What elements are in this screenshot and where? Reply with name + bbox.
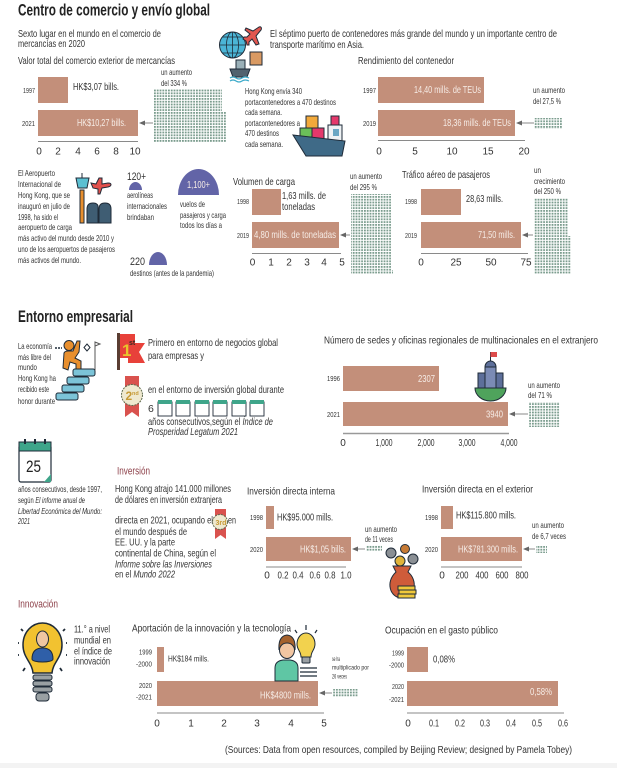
text block: años consecutivos Legatum: Prosperidad Legatum 2021 [148, 426, 238, 438]
bar 2021: 2021 [22, 119, 35, 128]
axis: 2,000 [418, 438, 435, 449]
chart heading: Inversión directa interna [247, 486, 335, 498]
icon: money bag and coins [386, 544, 418, 598]
callout: un aumento de 6,7 veces: de 6,7 veces [532, 531, 566, 541]
bar 2021: 2021 [327, 410, 340, 419]
text block: Hong Kong envía 340: portacontenedores a 470 destinos [245, 97, 336, 107]
stat: 1,100+ vuelos [178, 169, 226, 230]
panel: ocupación en el gasto público [385, 624, 568, 730]
axis: 800 [516, 570, 529, 582]
six calendars [148, 400, 264, 416]
axis: 0 [154, 718, 160, 730]
chart heading: Valor total del comercio exterior de mercancías [18, 55, 175, 67]
axis: 1.0 [340, 570, 352, 582]
icon: first-place flag [117, 333, 145, 370]
callout: se ha multiplicado por 26 veces: se ha [332, 656, 340, 663]
callout: un aumento del 295 %: un aumento [350, 171, 382, 181]
callout: se ha multiplicado por 26 veces: multiplicado por [332, 664, 370, 672]
bar 2019: 4,80 mills. de toneladas [254, 229, 336, 241]
panel: valor total del comercio exterior [18, 55, 226, 158]
axis: 2 [55, 146, 61, 158]
bar 2020: HK$781.300 mills. [458, 544, 518, 556]
stat: 1,100+ vuelos: 1,100+ [187, 179, 210, 191]
bar 2020-2021: 0,58% [530, 686, 552, 698]
text block: sexto lugar: Sexto lugar en el mundo en el comercio de [18, 28, 161, 40]
axis [264, 567, 352, 582]
text block: 11.° a nivel mundial: el índice de [74, 646, 112, 658]
bar 1999-2000: 0,08% [433, 654, 455, 666]
bar 2020-2021: 2020 [392, 682, 404, 691]
axis: 0.6 [310, 570, 321, 582]
text block: aeropuerto internacional [18, 168, 115, 265]
axis: 0 [405, 718, 411, 730]
icon: calendar 25: 25 [26, 457, 41, 476]
text block: séptimo puerto: transporte marítimo en Asia. [270, 39, 364, 51]
axis [340, 434, 518, 449]
axis: 5 [339, 258, 345, 268]
text block: la economía más libre: honor durante [18, 396, 55, 406]
text block: la economía más libre: mundo [18, 362, 37, 372]
axis: 3 [254, 718, 260, 730]
axis: 20 [518, 146, 530, 158]
stat: 120+ aerolíneas [127, 171, 167, 222]
text block: aeropuerto internacional: más activo del mundo desde 2010 y [18, 233, 115, 243]
text block: la economía más libre: más libre del [18, 352, 51, 362]
text block: entorno de inversión: en el entorno de inversión global durante [148, 384, 284, 396]
bar 1998 [237, 189, 326, 215]
chart heading: Ocupación en el gasto público [385, 624, 498, 636]
axis: 4,000 [500, 438, 518, 449]
stat: 1,100+ vuelos: pasajeros y carga [180, 210, 226, 220]
arrow [352, 546, 365, 552]
stat: 120+ aerolíneas: internacionales [127, 201, 167, 211]
axis [250, 254, 345, 268]
stat: 1,100+ vuelos: vuelos de [180, 199, 205, 209]
callout: un crecimiento del 250 %: un [534, 165, 541, 175]
axis: 0 [264, 570, 270, 582]
axis: 200 [456, 570, 469, 582]
axis: 2 [221, 718, 227, 730]
axis: 0.2 [278, 570, 289, 582]
bar 1998: 1998 [250, 513, 263, 522]
text block: primero en entorno de negocios [148, 337, 278, 362]
axis [405, 713, 568, 730]
axis: 15 [482, 146, 494, 158]
bar 1998: toneladas [282, 201, 315, 213]
bar 2021 [22, 110, 138, 136]
axis: 4 [321, 258, 327, 268]
icon: person with light bulb [275, 625, 317, 681]
callout: un aumento del 27,5 % [533, 85, 565, 106]
bar 1997: 14,40 mills. de TEUs [414, 84, 481, 96]
axis: 0.1 [429, 718, 439, 730]
axis: 0.2 [455, 718, 465, 730]
bar 2019: 2019 [363, 119, 376, 128]
axis: 600 [496, 570, 509, 582]
axis: 0.8 [324, 570, 336, 582]
bar 1996: 1996 [327, 374, 340, 383]
icon: headquarters building on globe [475, 352, 506, 401]
axis: 0 [376, 146, 382, 158]
bar 2020 [425, 537, 522, 561]
bar 1997: 1997 [23, 86, 35, 95]
callout: un aumento de 6,7 veces: un aumento [532, 520, 564, 530]
callout: se ha multiplicado por 26 veces: 26 veces [332, 674, 347, 680]
dot grid 27,5 % [534, 118, 562, 129]
callout: un aumento del 334 %: del 334 % [161, 78, 187, 88]
bar 1997 [363, 77, 484, 103]
callout: un aumento del 295 %: del 295 % [350, 182, 377, 192]
axis [439, 567, 529, 582]
callout: se ha multiplicado por 26 veces [332, 656, 370, 680]
icon: container ship [293, 116, 345, 156]
text block: aeropuerto internacional: El Aeropuerto [18, 168, 55, 178]
axis [36, 142, 141, 158]
dot grid 11 veces [366, 545, 382, 551]
chart heading: Rendimiento del contenedor [358, 55, 454, 67]
bar 2020-2021: HK$4800 mills. [260, 690, 311, 702]
bar 1998: HK$95.000 mills. [277, 512, 333, 524]
text block: años consecutivos Legatum: años consecutivos,según el Índice de [148, 415, 273, 428]
bar 1998: HK$115.800 mills. [456, 510, 516, 522]
stat: 220 destinos [130, 252, 214, 278]
axis: 0 [418, 258, 424, 268]
text block: aeropuerto internacional: más activos del mundo. [18, 255, 81, 265]
bar 1998: 1998 [405, 197, 417, 206]
bar 1998: 28,63 mills. [466, 193, 503, 205]
axis: 8 [113, 146, 119, 158]
bar 2019: 2019 [405, 231, 417, 240]
bar 1999-2000 [136, 647, 209, 672]
axis: 75 [520, 258, 532, 268]
heading: Entorno empresarial: Entorno empresarial [18, 307, 133, 326]
axis: 0 [250, 258, 256, 268]
stat: 120+ aerolíneas: brindaban [127, 212, 154, 222]
axis: 0.6 [558, 718, 568, 730]
text block: Hong Kong envía 340: portacontenedores a [245, 118, 300, 128]
callout: un aumento del 71 %: un aumento [528, 380, 560, 390]
axis [376, 140, 530, 158]
axis: 1 [188, 718, 194, 730]
arrow [139, 120, 153, 126]
bar 1999-2000 [389, 647, 455, 672]
icon: third-place medal: 3rd [216, 520, 226, 527]
arrow [516, 120, 534, 126]
dot grid 295 % [351, 194, 393, 274]
icon: third-place medal [212, 509, 228, 539]
bar 2020-2021 [136, 681, 318, 706]
chart heading: Tráfico aéreo de pasajeros [402, 169, 490, 181]
stat: 1,100+ vuelos: todos los días a [180, 220, 222, 230]
chart heading: Aportación de la innovación y la tecnología [132, 622, 291, 634]
text block: Hong Kong atrajo: en el Mundo 2022 [115, 568, 175, 580]
text block: años consecutivos Legatum [148, 415, 273, 438]
panel: volumen de carga [233, 171, 393, 274]
stat: 120+ aerolíneas: aerolíneas [127, 190, 153, 200]
icon: control tower, plane and hangars [76, 173, 111, 223]
axis: 50 [485, 258, 497, 268]
callout: un crecimiento del 250 % [534, 165, 565, 196]
callout: un aumento de 11 veces [365, 524, 397, 544]
icon: first-place flag: st [129, 340, 136, 347]
callout: un aumento del 334 % [161, 67, 192, 88]
bar 2020-2021: 2020 [139, 681, 152, 690]
text block: aeropuerto internacional: Internacional de [18, 179, 61, 189]
dot grid 334 % [154, 89, 226, 142]
text block: años consecutivos desde 1997: Libertad Económica del Mundo: [18, 506, 102, 516]
bar 1998 [405, 189, 503, 215]
text block: sexto lugar [18, 28, 161, 50]
axis: 10 [446, 146, 458, 158]
dot grid 250 % [534, 198, 571, 274]
text block: séptimo puerto [270, 28, 557, 51]
bar 1999-2000: -2000 [389, 660, 404, 670]
text block: años consecutivos desde 1997 [17, 484, 102, 526]
bar 1998: 1998 [425, 513, 438, 522]
bar 2020-2021: -2021 [389, 695, 404, 704]
bar 1997 [23, 77, 119, 103]
arrow [340, 232, 350, 238]
six calendars: 6 [148, 403, 154, 415]
text block: Hong Kong envía 340: Hong Kong envía 340 [245, 86, 302, 96]
text block: aeropuerto internacional: aeropuerto de carga [18, 222, 72, 232]
bar 2020-2021 [389, 681, 558, 706]
text block: sexto lugar: mercancías en 2020 [18, 38, 85, 50]
bar 1998: 1,63 mills. de [282, 190, 326, 202]
axis: 6 [94, 146, 100, 158]
arrow [319, 690, 332, 696]
bar 2019 [405, 222, 521, 248]
bar 2021 [327, 402, 508, 426]
bar 2020 [250, 537, 351, 561]
callout: un crecimiento del 250 %: crecimiento [534, 176, 565, 186]
text block: Hong Kong atrajo: Informe sobre las Inversiones [115, 558, 213, 570]
axis: 5 [321, 718, 327, 730]
axis: 1 [268, 258, 274, 268]
chart heading: Volumen de carga [233, 176, 295, 188]
text block: aeropuerto internacional: 1998, ha sido el [18, 212, 58, 222]
text block: la economía más libre: Hong Kong ha [18, 373, 56, 383]
arrow [522, 232, 533, 238]
bar 1999-2000: 1999 [139, 648, 152, 656]
bar 2020: 2020 [425, 545, 438, 554]
panel: inversión directa interna [247, 486, 397, 582]
panel: aportación de la innovación y la tecnología [132, 622, 370, 730]
text block: primero en entorno de negocios: para empresas y [148, 350, 205, 362]
axis: 0 [36, 146, 42, 158]
dot grid 6,7 veces [536, 546, 547, 553]
bar 1998 [425, 506, 516, 529]
text block: la economía más libre [18, 341, 56, 406]
text block: Hong Kong atrajo: EE. UU. y la parte [115, 536, 175, 548]
bar 1999-2000: 1999 [392, 648, 404, 658]
axis: 3,000 [458, 438, 476, 449]
text block: Hong Kong atrajo: continental de China, según el [115, 548, 216, 560]
text block: Hong Kong atrajo: en [228, 514, 236, 526]
axis: 4 [288, 718, 294, 730]
text block: Hong Kong atrajo [115, 483, 236, 580]
callout: un aumento del 71 % [528, 380, 560, 400]
text block: 11.° a nivel mundial: mundial en [74, 634, 111, 646]
callout: un aumento de 11 veces: un aumento [365, 524, 397, 534]
text block: aeropuerto internacional: Hong Kong, que se [18, 190, 70, 200]
text block: 11.° a nivel mundial: 11.° a nivel [74, 624, 110, 636]
text block: primero en entorno de negocios: Primero en entorno de negocios global [148, 337, 278, 349]
text block: aeropuerto internacional: uno de los aeropuertos de pasajeros [18, 244, 115, 254]
panel: rendimiento del contenedor [358, 55, 565, 158]
bar 2021: HK$10,27 bills. [77, 117, 126, 129]
bar 2019: 18,36 mills. de TEUs [443, 117, 511, 129]
title: Centro de comercio y envío global: Centro de comercio y envío global [18, 0, 210, 20]
callout: un aumento del 71 %: del 71 % [528, 390, 552, 400]
bar 1996: 2307 [418, 373, 435, 385]
callout: un aumento del 27,5 %: del 27,5 % [533, 96, 561, 106]
text block: Hong Kong envía 340 [245, 86, 336, 149]
icon: first-place flag: 1 [122, 341, 131, 360]
stat: 120+ aerolíneas: 120+ [127, 171, 146, 183]
axis [154, 713, 327, 730]
bar 1998: 1998 [237, 197, 249, 206]
bar 2021: 3940 [486, 408, 503, 420]
axis: 4 [75, 146, 81, 158]
chart heading: Inversión directa en el exterior [422, 484, 533, 496]
text block: 11.° a nivel mundial [74, 624, 112, 668]
text block: la economía más libre: La economía [18, 341, 52, 351]
callout: un aumento del 27,5 %: un aumento [533, 85, 565, 95]
icon: second-place medal [122, 376, 142, 417]
callout: un aumento del 334 %: un aumento [161, 67, 192, 77]
text block: años consecutivos desde 1997: 2021 [17, 516, 30, 526]
text block: la economía más libre: recibido este [18, 384, 49, 394]
axis: 3 [304, 258, 310, 268]
bar 2019: 71,50 mills. [478, 229, 515, 241]
icon: person climbing steps [55, 340, 100, 400]
icon: light bulb with person [18, 623, 67, 701]
text block: Hong Kong envía 340: 470 destinos [245, 128, 279, 138]
text block: años consecutivos desde 1997: años consecutivos, desde 1997, [18, 484, 102, 494]
axis: 0.4 [292, 570, 304, 582]
bar 1997: HK$3,07 bills. [73, 81, 119, 93]
text block: aeropuerto internacional: inauguró en julio de [18, 201, 70, 211]
icon: globe, plane, box and ship [220, 27, 262, 82]
panel: tráfico aéreo de pasajeros [402, 165, 571, 274]
bar 2019 [237, 222, 339, 248]
axis: 0.5 [532, 718, 542, 730]
axis: 10 [129, 146, 141, 158]
icon: second-place medal: nd [132, 391, 139, 397]
text block: 11.° a nivel mundial: innovación [74, 656, 110, 668]
arrow [509, 412, 528, 416]
axis [418, 254, 532, 268]
axis: 0.4 [506, 718, 516, 730]
stat: 220 destinos: 220 [130, 256, 145, 268]
axis: 0 [340, 438, 346, 449]
bar 2020: 2020 [250, 545, 263, 554]
heading: Innovación: Innovación [18, 598, 58, 610]
axis: 5 [412, 146, 418, 158]
bar 1999-2000: -2000 [136, 660, 152, 668]
callout: un aumento de 6,7 veces [532, 520, 566, 541]
bar 1999-2000: HK$184 mills. [168, 654, 209, 664]
arrow [523, 546, 535, 552]
callout: un aumento del 295 % [350, 171, 382, 192]
axis: 400 [476, 570, 489, 582]
heading: Inversión: Inversión [117, 466, 150, 478]
stat: 220 destinos: destinos (antes de la pandemia) [130, 268, 214, 278]
text block: años consecutivos desde 1997: según El informe anual de [18, 495, 85, 505]
callout: un crecimiento del 250 %: del 250 % [534, 186, 561, 196]
text block: Hong Kong atrajo: directa en 2021, ocupando el [115, 514, 213, 526]
text block: Hong Kong envía 340: cada semana. [245, 139, 283, 149]
dot grid 26 veces [333, 689, 358, 697]
callout: un aumento de 11 veces: de 11 veces [365, 534, 393, 544]
axis: 0 [439, 570, 445, 582]
bar 1998 [250, 506, 333, 529]
axis: 0.3 [480, 718, 490, 730]
bar 1996 [327, 366, 439, 391]
icon: calendar 25 [19, 439, 51, 482]
bar 2019 [363, 110, 515, 136]
axis: 25 [450, 258, 462, 268]
text block: Hong Kong atrajo: el mundo después de [115, 526, 187, 538]
text block: Hong Kong envía 340: cada semana. [245, 107, 282, 117]
bar 2019: 2019 [237, 231, 249, 240]
panel: número de sedes [324, 334, 598, 449]
bar 2020-2021: -2021 [136, 692, 152, 702]
text block: Hong Kong atrajo: Hong Kong atrajo 141.000 millones [115, 483, 231, 495]
axis: 2 [286, 258, 292, 268]
dot grid 71 % [529, 402, 560, 427]
panel: inversión directa en el exterior [422, 484, 566, 582]
axis: 1,000 [376, 438, 393, 449]
bar 2020: HK$1,05 bills. [300, 544, 346, 556]
text block: Hong Kong atrajo: de dólares en inversión extranjera [115, 494, 222, 506]
icon: second-place medal: 2 [126, 389, 132, 403]
bar 1997: 1997 [363, 86, 376, 95]
